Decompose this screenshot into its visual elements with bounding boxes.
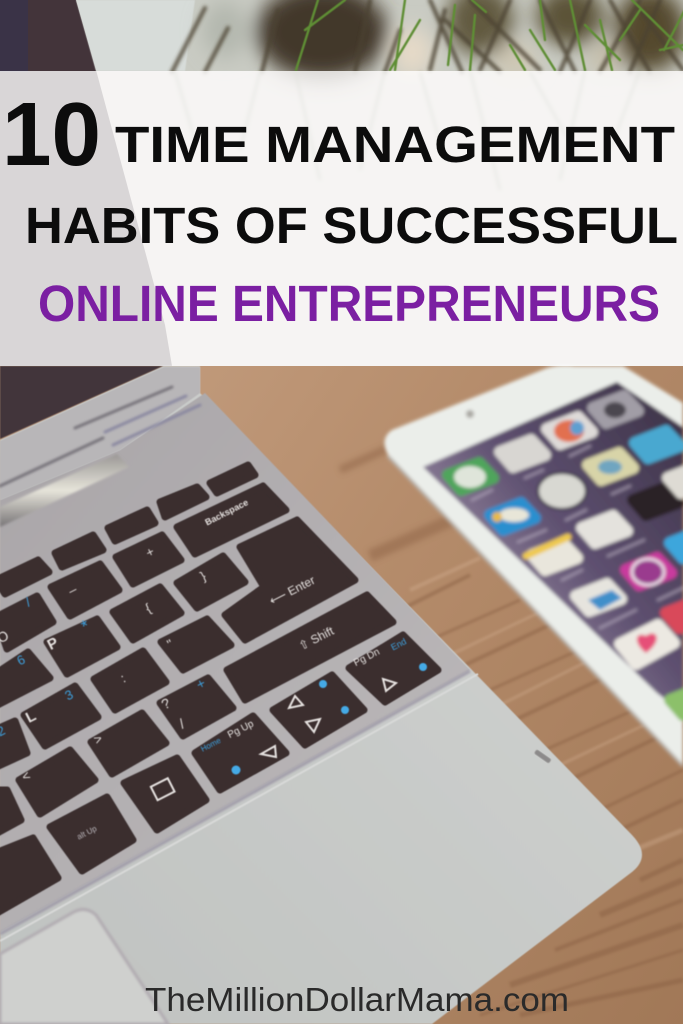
footer website: TheMillionDollarMama.com [145,981,569,1018]
right edge apps [668,466,683,493]
maps [588,453,633,480]
laptop body [0,366,642,1024]
plant green blades [296,0,683,70]
wall behind band [0,71,683,366]
top letter row [0,556,245,709]
photos [547,417,592,444]
key labels: End [389,636,408,652]
music [626,558,671,585]
title band [0,71,683,366]
smartphone [384,365,683,766]
notes [532,543,577,570]
key labels: } [198,568,209,584]
hinge highlight bar [0,454,129,527]
weather [490,503,535,530]
key labels: Backspace [203,497,250,527]
hinge slots [0,387,200,486]
shift key [227,595,393,700]
laptop lid purple edge [0,0,28,72]
key labels: ? [159,695,173,712]
key labels: ⇧ Shift [296,623,337,653]
lower letter row [0,678,233,837]
wall above band [0,0,683,72]
plant ghost stems behind band [175,70,640,190]
laptop screen base [0,366,163,439]
big number 10: 10 [2,85,101,185]
palm rest bevel [0,674,478,941]
hinge panel [0,367,200,500]
key labels: / [176,715,187,732]
title line 3: ONLINE ENTREPRENEURS [38,275,660,332]
key labels: alt Up [76,824,99,842]
key labels: Pg Dn [352,647,382,669]
bottom row keys [0,635,438,917]
videos [635,431,680,458]
number row [0,486,286,649]
key labels: ⟵ Enter [267,573,317,608]
key labels: { [143,600,154,616]
key labels [0,497,427,842]
health [620,625,674,664]
plant dark stems [172,0,683,72]
palm rest edge [0,671,470,934]
wood grain [340,425,683,1015]
keyboard deck [0,393,470,932]
key labels: _ [62,576,77,594]
laptop lid dark [0,0,172,366]
key labels: L [23,707,39,727]
key labels: / [23,594,33,609]
icon caption smudges [472,446,683,628]
key labels: > [91,731,105,747]
title line 1: TIME MANAGEMENT [115,116,675,173]
key labels: P [45,634,61,654]
stocks dark [633,488,678,515]
key labels: Pg Up [226,718,256,741]
blue function dots [232,663,427,774]
phone body [384,365,683,766]
key labels: " [164,636,176,652]
key labels: + [143,544,157,560]
phone bottom edge shadow [388,456,683,766]
indicator light [534,749,552,764]
key labels: + [193,675,208,693]
messages [448,463,493,490]
newsstand [576,584,621,611]
key labels: : [118,670,128,685]
top backdrop with plant [0,0,683,366]
phone screen [423,382,683,713]
home speaker [466,410,474,418]
clock [538,473,586,509]
app icons [448,396,683,715]
plant blurred mass [203,0,683,80]
laptop [0,366,642,1024]
title [2,85,678,332]
calendar [500,440,545,467]
title line 2: HABITS OF SUCCESSFUL [25,197,678,254]
camera [593,396,638,423]
laptop lid frame [76,0,195,71]
keyboard keys [0,465,438,917]
key labels: 6 [14,652,28,668]
key labels: * [78,616,93,636]
key labels: < [19,768,33,784]
reminders [582,516,627,543]
arrow glyphs and function marks [151,679,396,800]
touchpad [0,909,168,1024]
key labels: Home [199,736,223,754]
key labels: 3 [62,687,76,703]
function row [0,465,255,594]
enter key [225,520,355,640]
middle letter row [0,619,231,770]
